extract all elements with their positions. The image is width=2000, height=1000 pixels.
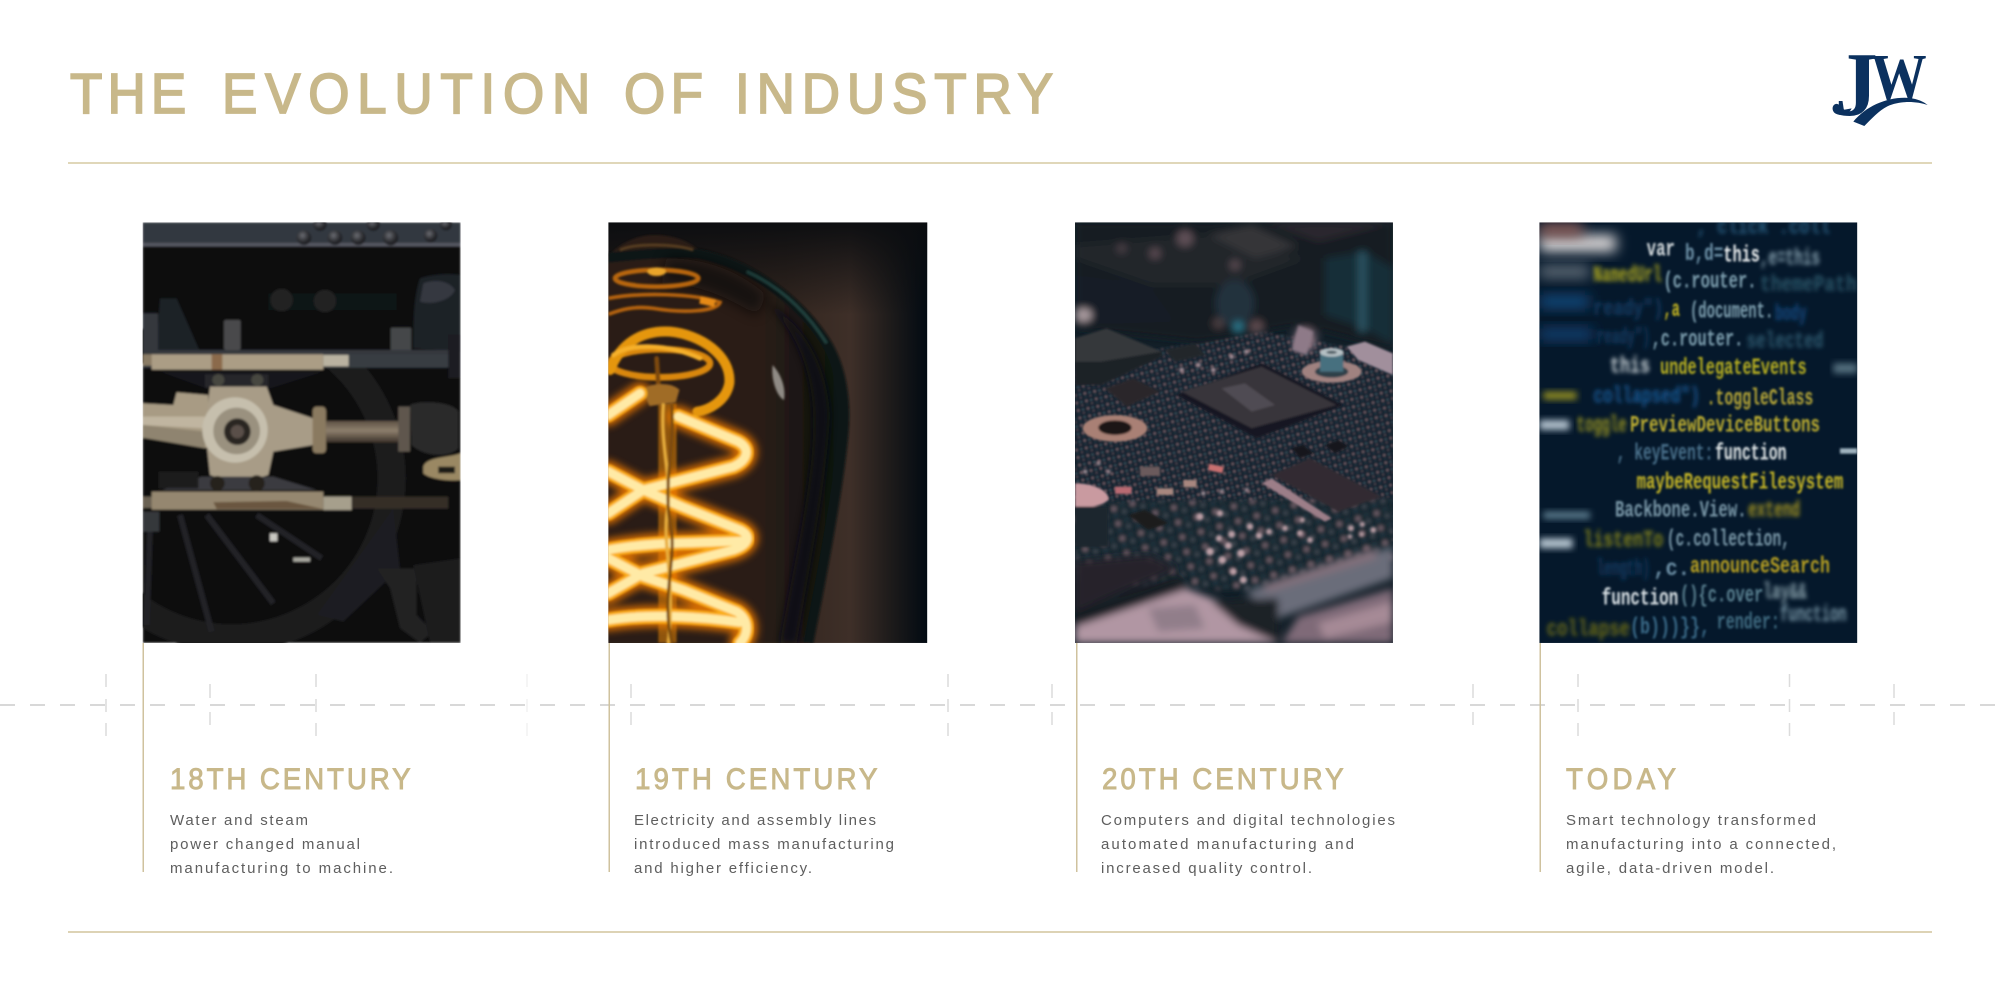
title: OF [624, 61, 703, 125]
photo: source code on a screen: ready") [1597, 324, 1650, 350]
photo: circuit board [1075, 222, 1393, 643]
title: INDUSTRY [735, 61, 1053, 125]
filament lower strands: core [608, 393, 747, 643]
upper coils [610, 349, 710, 377]
photo: source code on a screen: listenTo [1583, 528, 1663, 554]
glass inner shadow [775, 309, 830, 643]
photo: source code on a screen: , keyEvent: [1617, 440, 1713, 466]
photo: source code on a screen: length) [1597, 556, 1650, 582]
bulb top reflections [620, 245, 693, 250]
photo: source code on a screen: ,c.router. [1652, 327, 1743, 353]
title: EVOLUTION [222, 61, 590, 125]
twisted stem highlights [663, 405, 670, 643]
heading: TODAY [1566, 763, 1676, 796]
logo: JW: J [1835, 36, 1878, 136]
description: Computers and digital technologies [1101, 812, 1395, 829]
piston rod [326, 421, 401, 442]
dark chip [1128, 510, 1168, 530]
wheel [142, 312, 406, 643]
photo: source code on a screen: PreviewDeviceButtons [1630, 413, 1820, 439]
lower slide bar [143, 497, 153, 508]
photo: source code on a screen: maybeRequestFilesystem [1637, 469, 1843, 495]
photo: source code on a screen: this [1610, 353, 1650, 379]
photo: source code on a screen: function [1715, 440, 1787, 466]
heading: 18TH CENTURY [170, 763, 411, 796]
photo: source code on a screen: Backbone.View. [1615, 498, 1747, 524]
photo: source code on a screen: render: [1717, 609, 1780, 635]
bottom divider [68, 931, 1932, 933]
glass stem [658, 403, 677, 643]
blurred top components [1075, 222, 1393, 351]
title [70, 61, 1053, 125]
description [1566, 812, 1836, 877]
photo: source code on a screen: ,c. [1653, 556, 1690, 582]
left arm [143, 392, 208, 448]
description: manufacturing into a connected, [1566, 836, 1836, 853]
photo: source code on a screen: extend [1748, 498, 1800, 524]
description: increased quality control. [1101, 860, 1312, 877]
main processor [1177, 363, 1343, 438]
photo: source code on a screen: ready") [1593, 296, 1663, 322]
filament glow [608, 393, 747, 643]
heading: 20TH CENTURY [1102, 763, 1344, 796]
photo: source code on a screen: announceSearch [1690, 553, 1830, 579]
photo: source code on a screen: var [1647, 237, 1675, 263]
panel: 18th century [142, 222, 461, 876]
description: Smart technology transformed [1566, 812, 1816, 829]
description [634, 812, 894, 877]
top slide bar [143, 350, 453, 355]
description: Water and steam [170, 812, 308, 829]
description [1101, 812, 1395, 877]
timeline: dashed axis with tick marks [0, 674, 2000, 736]
photo: source code on a screen: ,a [1663, 297, 1680, 323]
year line [608, 643, 610, 872]
photo: source code on a screen: this [1723, 243, 1760, 269]
photo: source code on a screen: body [1775, 301, 1807, 327]
crosshead upper bolts [160, 372, 323, 388]
photo: source code on a screen: collapse [1547, 617, 1630, 643]
photo: source code on a screen: (c.collection, [1667, 527, 1790, 553]
panel: 20th century [1075, 222, 1395, 877]
photo: source code on a screen: toggle [1577, 413, 1627, 439]
photo: source code on a screen: ,e=this [1760, 245, 1820, 271]
red parts [1208, 464, 1224, 473]
top divider [68, 162, 1932, 164]
photo: source code on a screen: function [1602, 585, 1678, 611]
logo: JW: W [1871, 41, 1927, 114]
photo: source code on a screen: (document. [1690, 299, 1773, 325]
photo: source code on a screen: .toggleClass [1707, 385, 1813, 411]
photo: source code on a screen: b,d= [1685, 241, 1723, 267]
panel: today [1539, 214, 1857, 877]
left capacitor [1075, 483, 1108, 508]
description: automated manufacturing and [1101, 836, 1354, 853]
copper ring [1083, 415, 1147, 442]
description: Electricity and assembly lines [634, 812, 876, 829]
panel: 19th century [608, 222, 927, 877]
title: THE [70, 61, 186, 125]
description: agile, data-driven model. [1566, 860, 1774, 877]
photo: steam locomotive crosshead [142, 222, 461, 643]
description: manufacturing to machine. [170, 860, 393, 877]
photo: source code on a screen: (){c.over [1680, 583, 1763, 609]
blurred foreground [1075, 547, 1393, 643]
photo: source code on a screen: undelegateEvents [1660, 355, 1807, 381]
year line [1076, 643, 1078, 872]
description [170, 812, 393, 877]
photo: source code on a screen: themePath [1760, 272, 1857, 298]
logo: JW [1833, 36, 1928, 136]
photo: filament light bulb [608, 222, 927, 643]
photo: source code on a screen: (c.router. [1663, 269, 1757, 295]
photo: source code on a screen [1539, 214, 1857, 643]
year line [142, 643, 144, 872]
photo: source code on a screen: collapsed") [1593, 383, 1700, 409]
photo: source code on a screen: (b)))}}, [1630, 614, 1710, 640]
photo: source code on a screen: lay&& [1763, 579, 1807, 605]
heading: 19TH CENTURY [635, 763, 878, 796]
board texture [1075, 332, 1393, 568]
metal standoff [1302, 361, 1362, 383]
crosshead lower bolts [162, 477, 317, 490]
year line [1540, 643, 1541, 872]
left chips [1075, 328, 1162, 378]
bright solder dots [1083, 349, 1376, 584]
photo: source code on a screen: selected [1747, 329, 1823, 355]
second chip [1262, 478, 1332, 522]
crosshead body [205, 387, 313, 485]
photo: source code on a screen: , click .coll [1697, 214, 1830, 240]
description: and higher efficiency. [634, 860, 812, 877]
filament lower strands: outer [608, 393, 747, 643]
description: introduced mass manufacturing [634, 836, 894, 853]
description: power changed manual [170, 836, 360, 853]
photo: source code on a screen: NamedUrl [1593, 263, 1662, 289]
photo: source code on a screen: function [1780, 602, 1847, 628]
